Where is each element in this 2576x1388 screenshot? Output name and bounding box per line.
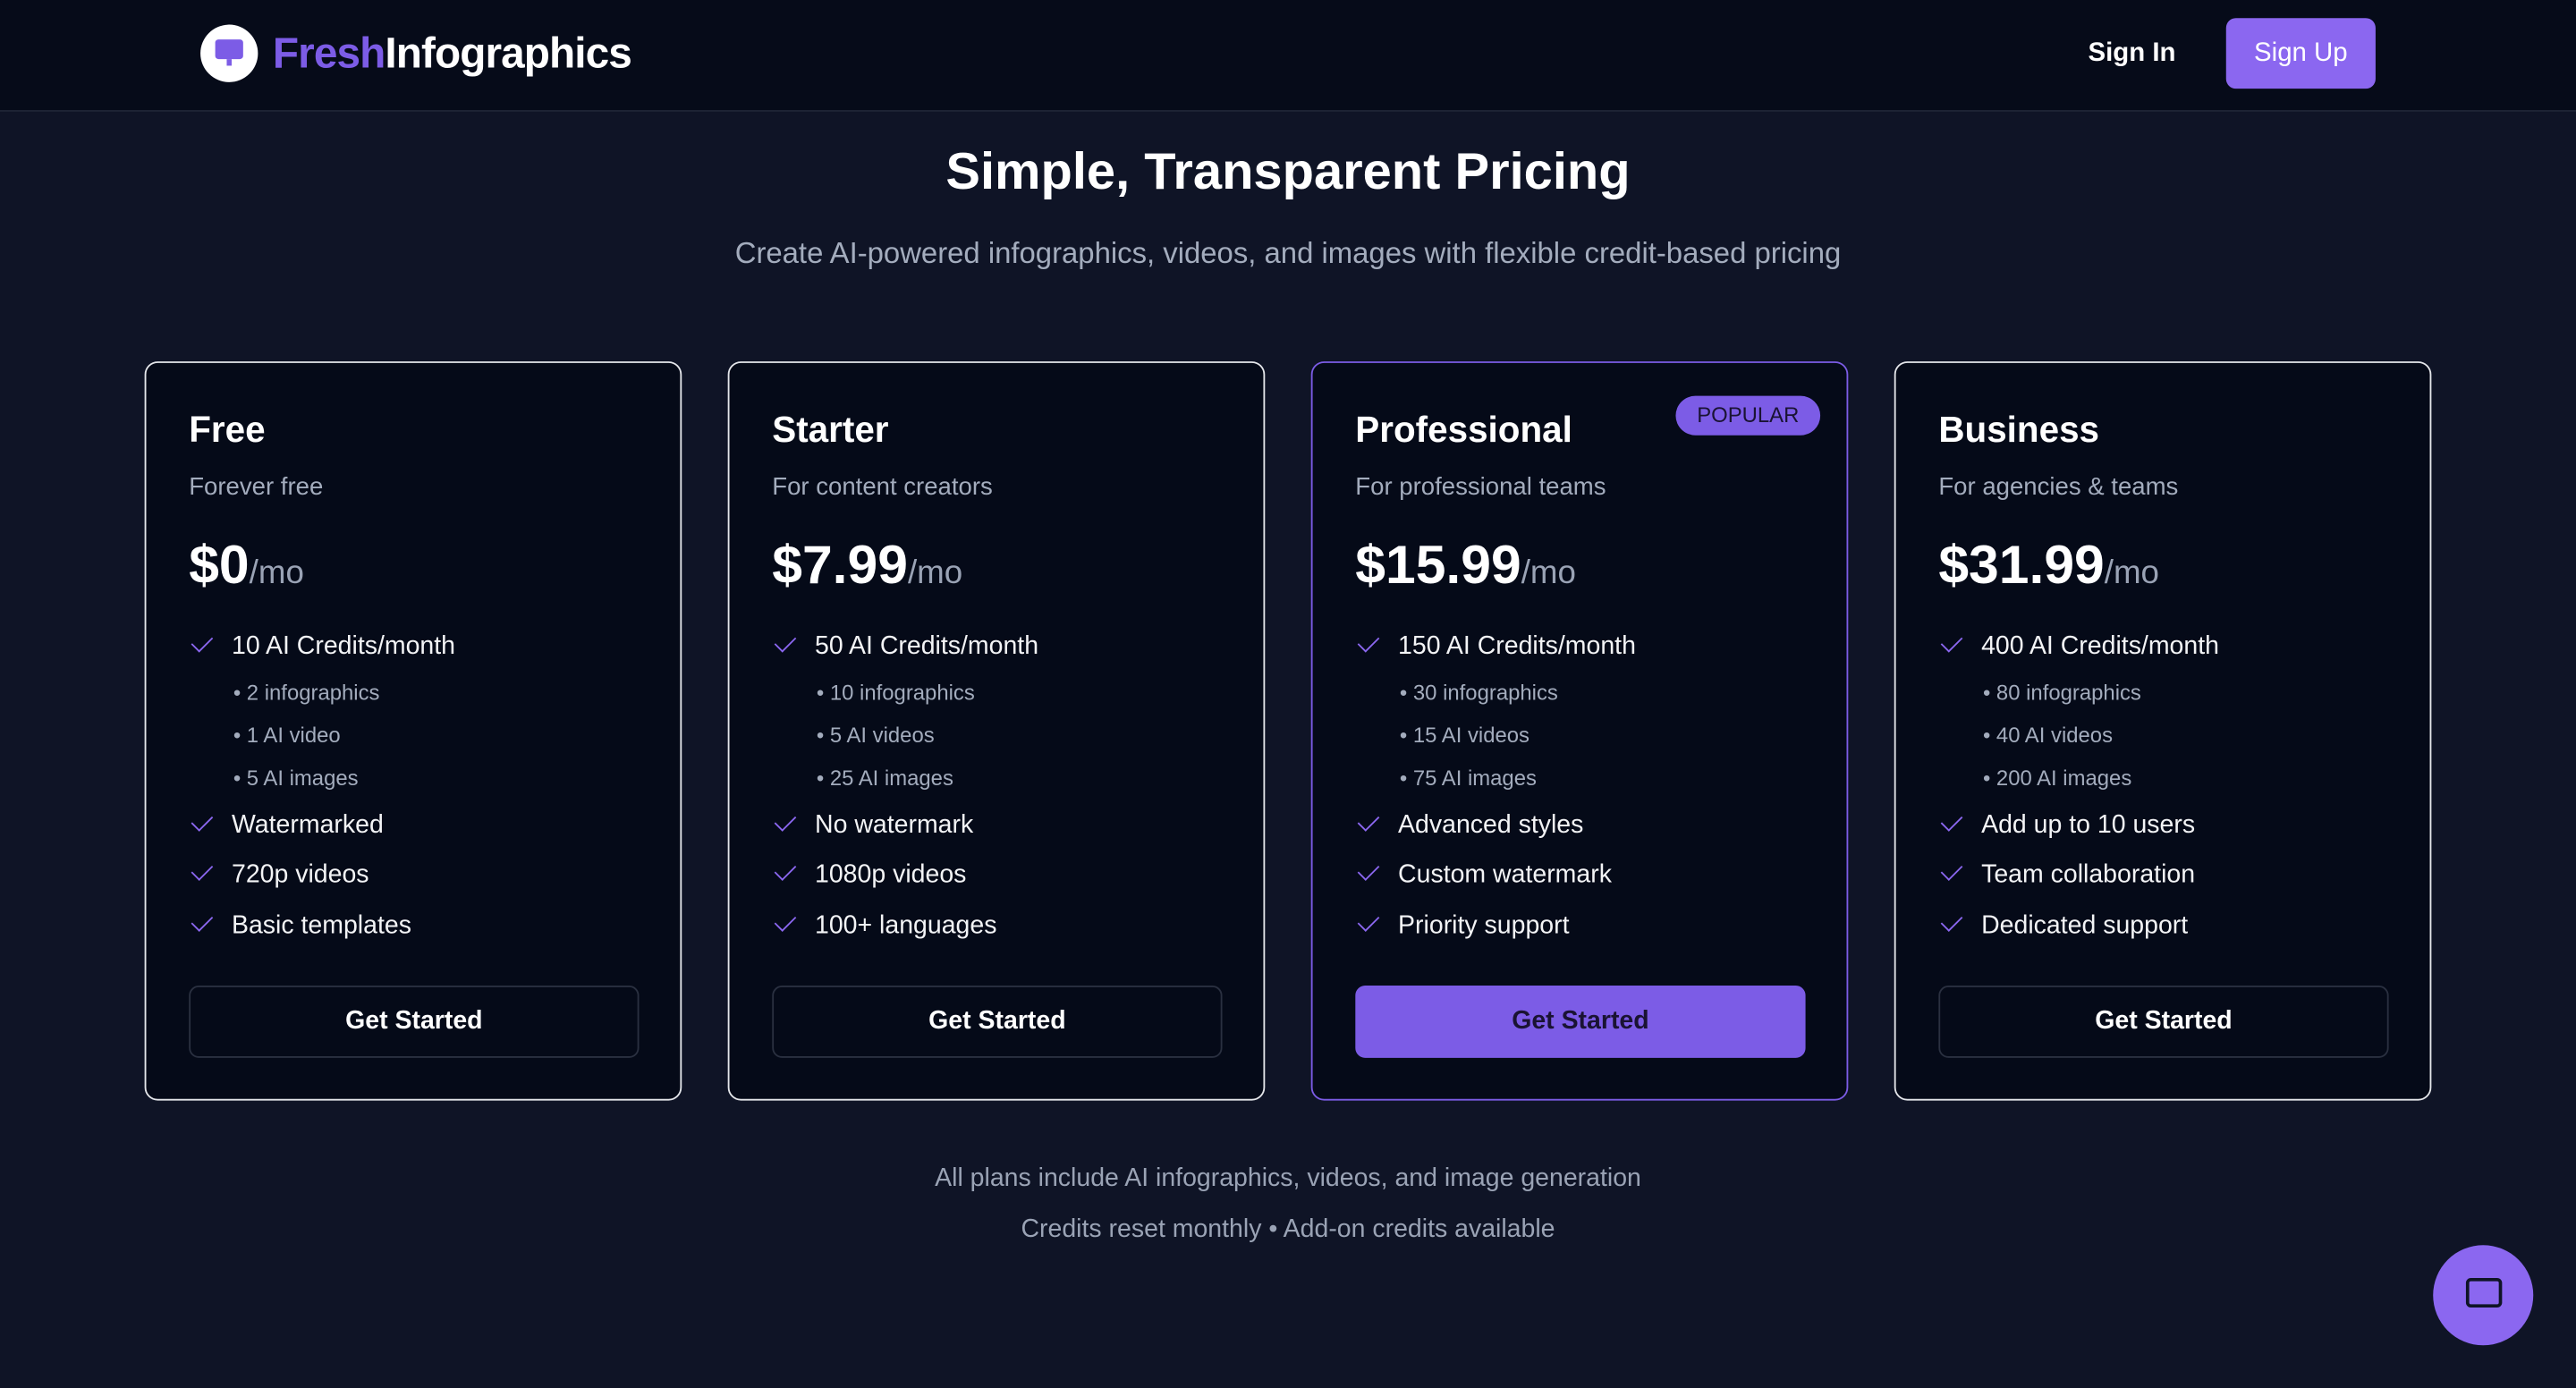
header bar bbox=[0, 0, 2576, 112]
panel: professional: Advanced styles bbox=[1398, 811, 1583, 840]
subtitle: Create AI-powered infographics, videos, and images with flexible credit-based pricing bbox=[735, 236, 1841, 269]
panel: starter: 50 AI Credits/month bbox=[815, 632, 1038, 660]
sign up button bbox=[2226, 18, 2376, 89]
panel: business: Dedicated support bbox=[1981, 911, 2188, 940]
logo text: FreshInfographics bbox=[273, 28, 631, 77]
panel: starter: • 5 AI videos bbox=[817, 723, 935, 748]
panel: starter: Starter bbox=[772, 409, 889, 450]
panel: starter: • 10 infographics bbox=[817, 680, 975, 705]
panel: free: Watermarked bbox=[232, 811, 384, 840]
popular badge: POPULAR bbox=[1697, 402, 1799, 427]
panel: business: • 200 AI images bbox=[1983, 766, 2131, 790]
panel: professional: Get Started bbox=[1512, 1007, 1649, 1035]
popular badge bbox=[1675, 396, 1820, 436]
panel: professional: $15.99/mo bbox=[1355, 534, 1576, 595]
panel: free: Free bbox=[189, 409, 266, 450]
panel: starter: No watermark bbox=[815, 811, 973, 840]
panel: professional: • 75 AI images bbox=[1400, 766, 1537, 790]
panel: free: Forever free bbox=[189, 473, 323, 501]
panel: free: • 5 AI images bbox=[233, 766, 359, 790]
panel: professional: • 30 infographics bbox=[1400, 680, 1558, 705]
panel: business: $31.99/mo bbox=[1938, 534, 2159, 595]
panel: business: Get Started bbox=[2095, 1007, 2233, 1035]
panel: free bbox=[145, 361, 682, 1101]
panel: free: 10 AI Credits/month bbox=[232, 632, 455, 660]
panel: free: • 1 AI video bbox=[233, 723, 341, 748]
panel: free: Basic templates bbox=[232, 911, 411, 940]
panel: professional: • 15 AI videos bbox=[1400, 723, 1530, 748]
panel: business: Add up to 10 users bbox=[1981, 811, 2195, 840]
sign in link: Sign In bbox=[2088, 39, 2175, 67]
panel: professional: Professional bbox=[1355, 409, 1572, 450]
panel: starter: 100+ languages bbox=[815, 911, 996, 940]
panel: free: • 2 infographics bbox=[233, 680, 379, 705]
panel: free: Get Started bbox=[345, 1007, 483, 1035]
panel: professional: Priority support bbox=[1398, 911, 1570, 940]
panel: business: 400 AI Credits/month bbox=[1981, 632, 2219, 660]
panel: free: $0/mo bbox=[189, 534, 304, 595]
footer note bbox=[935, 1164, 1641, 1243]
title: Simple, Transparent Pricing bbox=[945, 141, 1631, 200]
panel: starter bbox=[728, 361, 1265, 1101]
panel: starter: 1080p videos bbox=[815, 860, 966, 889]
panel: business: • 80 infographics bbox=[1983, 680, 2141, 705]
footer note: Credits reset monthly • Add-on credits available bbox=[1021, 1215, 1555, 1243]
panel: professional: Custom watermark bbox=[1398, 860, 1612, 889]
panel: business: Team collaboration bbox=[1981, 860, 2195, 889]
panel: professional: 150 AI Credits/month bbox=[1398, 632, 1636, 660]
footer note: All plans include AI infographics, videos, and image generation bbox=[935, 1164, 1641, 1192]
panel: professional: For professional teams bbox=[1355, 473, 1606, 501]
panel: business: Business bbox=[1938, 409, 2099, 450]
sign up button: Sign Up bbox=[2254, 39, 2348, 67]
panel: starter: • 25 AI images bbox=[817, 766, 953, 790]
panel: business bbox=[1894, 361, 2431, 1101]
panel: starter: For content creators bbox=[772, 473, 993, 501]
panel: business: • 40 AI videos bbox=[1983, 723, 2113, 748]
icon: chat bubble bbox=[2433, 1245, 2533, 1345]
panel: professional bbox=[1311, 361, 1848, 1101]
panel: free: 720p videos bbox=[232, 860, 369, 889]
panel: starter: Get Started bbox=[928, 1007, 1066, 1035]
panel: business: For agencies & teams bbox=[1938, 473, 2178, 501]
logo icon bbox=[200, 25, 258, 82]
panel: starter: $7.99/mo bbox=[772, 534, 962, 595]
